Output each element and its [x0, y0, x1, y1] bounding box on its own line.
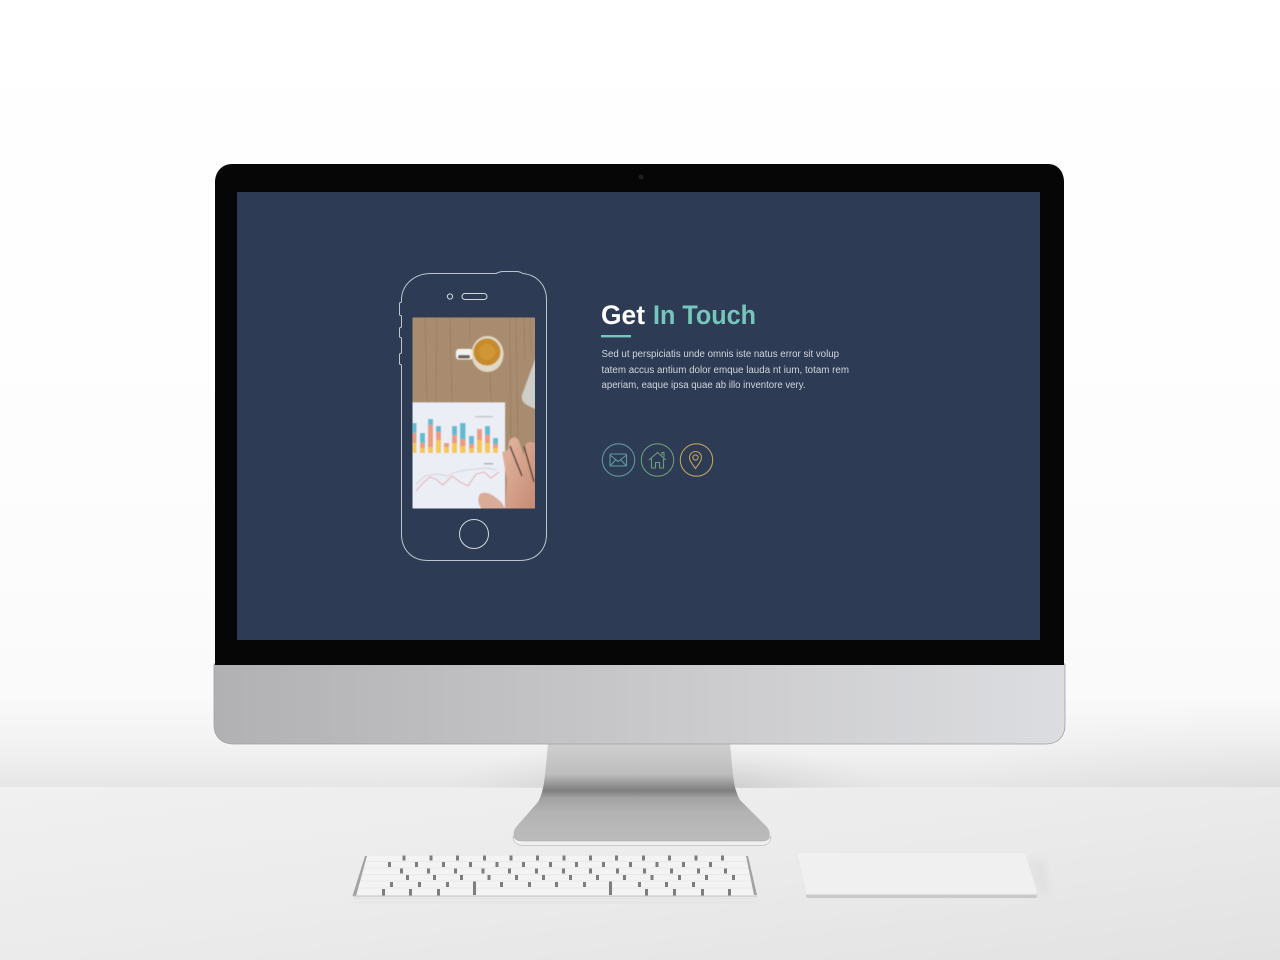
coffee cup: [456, 336, 504, 372]
monitor screen: [237, 192, 1040, 640]
heading underline: [601, 335, 631, 337]
keyboard body: [352, 856, 757, 900]
trackpad lip: [806, 893, 1037, 898]
trackpad: [797, 852, 1050, 898]
trackpad top: [797, 852, 1037, 894]
paper: [410, 402, 505, 510]
body text: aperiam, eaque ipsa quae ab illo inventore very.: [602, 380, 806, 391]
heading: Get In Touch: In Touch: [653, 300, 756, 330]
phone outline: [400, 272, 546, 560]
phone speaker: [462, 294, 487, 300]
bar chart on paper: [412, 419, 498, 453]
monitor chin: [214, 664, 1065, 744]
keyboard key gaps: [382, 856, 735, 896]
monitor bezel: [215, 164, 1064, 665]
webcam: [638, 174, 644, 180]
phone photo: [410, 315, 538, 511]
monitor: [214, 164, 1065, 846]
trackpad shadow: [1028, 860, 1050, 894]
icon: envelope: [602, 444, 635, 476]
line chart on paper: [416, 468, 499, 491]
icon: house: [641, 444, 674, 476]
monitor stand: [513, 744, 771, 846]
keyboard: [352, 856, 757, 902]
stand shadow on wall: [502, 762, 825, 788]
heading: Get In Touch: [601, 300, 756, 330]
desk surface: [0, 787, 1280, 960]
body text: [602, 349, 849, 391]
icon: location pin: [680, 444, 713, 476]
phone home button: [460, 520, 488, 548]
hand: [478, 437, 536, 510]
phone mockup: [400, 272, 546, 560]
wood desk: [410, 315, 538, 511]
body text: tatem accus antium dolor emque lauda nt ium, totam rem: [602, 365, 849, 376]
heading: Get In Touch: Get: [601, 300, 645, 330]
tablet: [522, 357, 536, 409]
keyboard shadow: [356, 898, 754, 902]
body text: Sed ut perspiciatis unde omnis iste natus error sit volup: [602, 349, 839, 360]
phone camera: [447, 294, 453, 299]
